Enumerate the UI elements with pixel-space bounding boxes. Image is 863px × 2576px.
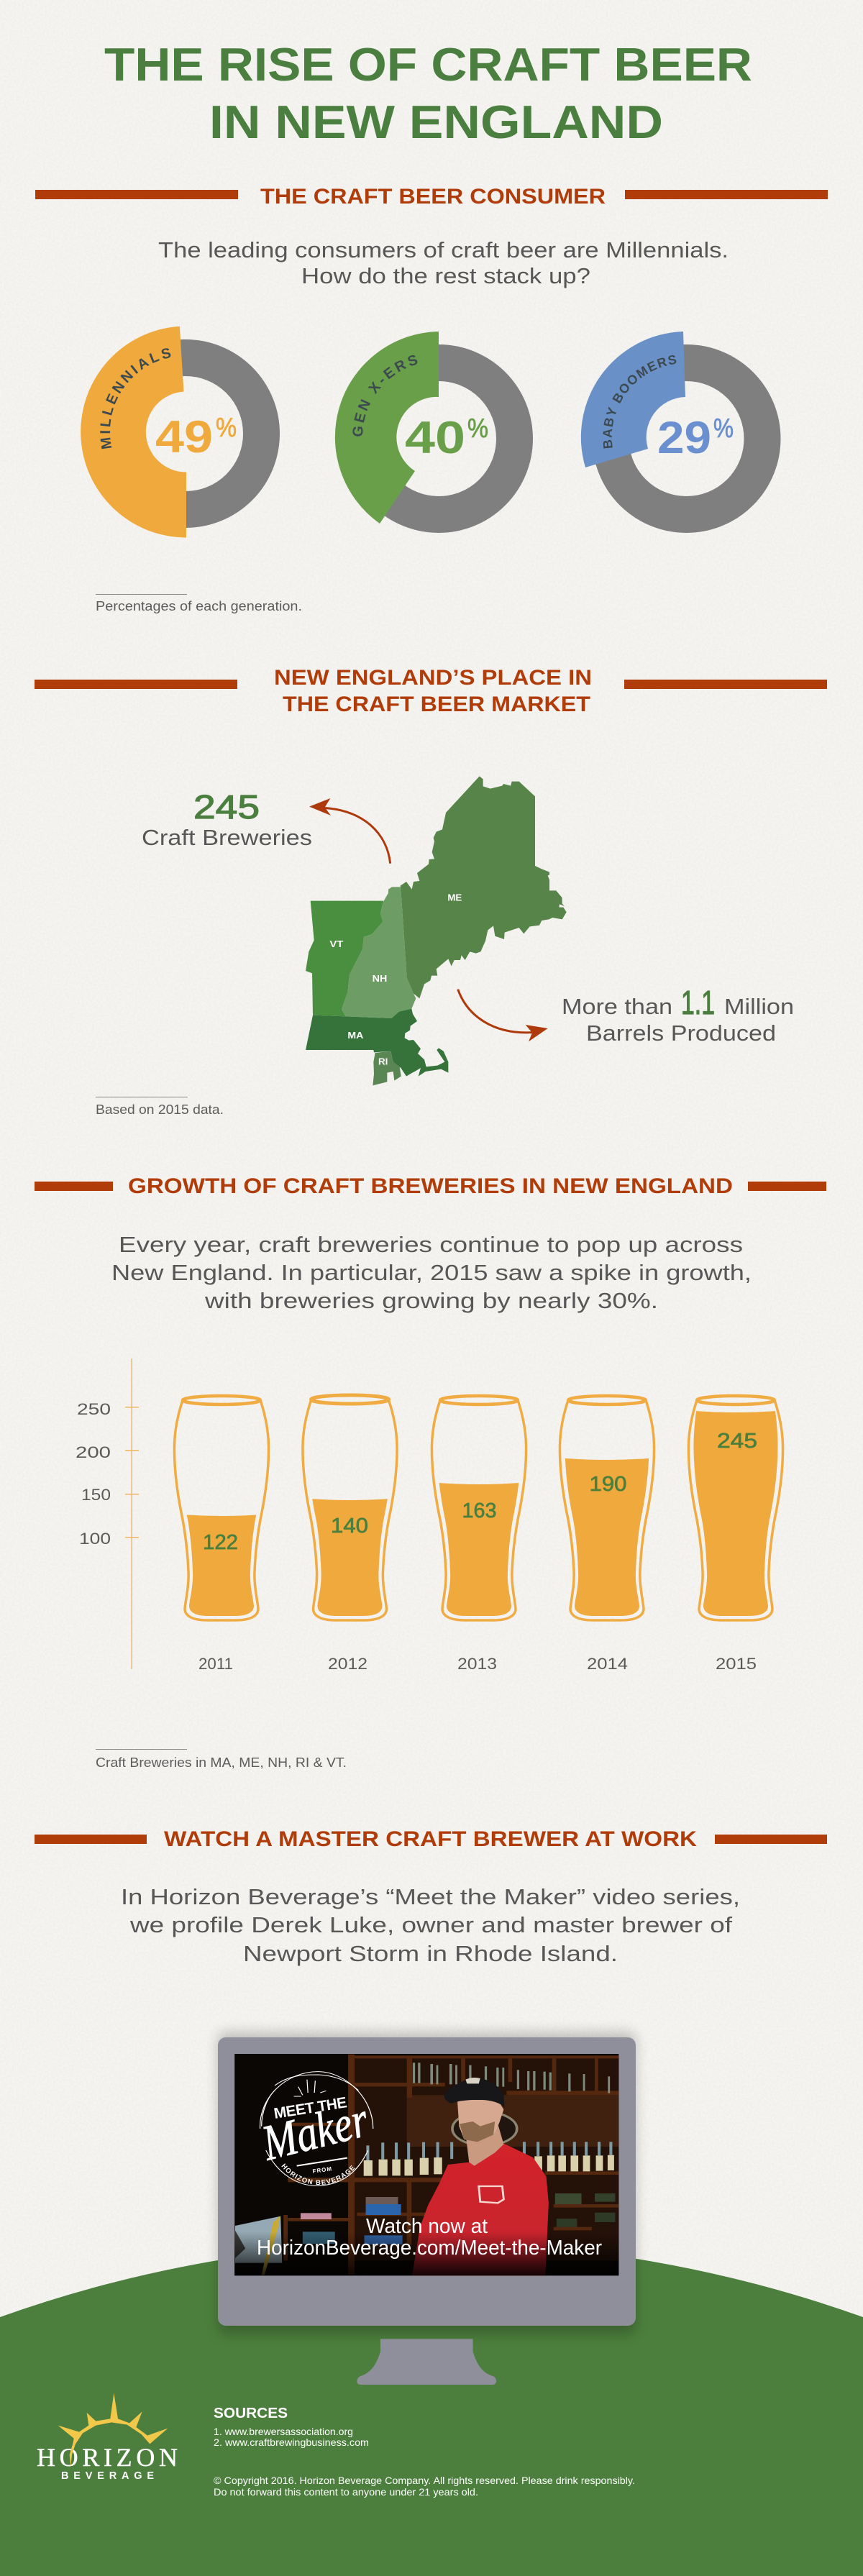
beer glass: 2013, 163: 163 [462, 1499, 496, 1522]
video caption: Watch now at [366, 2215, 488, 2238]
monitor stand [357, 2339, 496, 2385]
donut chart: millennials 49% [81, 326, 280, 538]
beer glass: 2013, 163: 2013 [457, 1655, 497, 1673]
donut chart: millennials 49%: MILLENNIALS [100, 348, 171, 449]
footer green hill [0, 2242, 863, 2576]
sources: 1. www.brewersassociation.org [214, 2426, 353, 2437]
stamp text: meet the maker: HORIZON BEVERAGE [281, 2163, 355, 2185]
icon: sun [58, 2393, 168, 2467]
stat: 1.1 million barrels: More than [562, 994, 672, 1019]
bottle row [364, 2155, 614, 2176]
footnote: percentages: Percentages of each generation. [96, 599, 302, 613]
chart axis: 150 [81, 1486, 111, 1504]
round wall sign [452, 2112, 517, 2145]
donut chart: gen x-ers 40%: 40 [405, 413, 465, 463]
stat: 1.1 million barrels: Barrels Produced [586, 1020, 776, 1046]
chart axis: 200 [76, 1443, 111, 1461]
stat: 245 craft breweries [142, 788, 312, 850]
chart axis: 100 [79, 1530, 111, 1548]
copyright [214, 2475, 635, 2498]
donut chart: baby boomers 29%: BABY BOOMERS [603, 355, 676, 449]
section heading: new england's place: NEW ENGLAND’S PLACE IN [274, 666, 592, 690]
section heading: watch a master [35, 1827, 827, 1851]
state: vermont [306, 901, 383, 1016]
stamp rings and rays [260, 2072, 373, 2186]
beer glass: 2014, 190: 190 [590, 1473, 627, 1496]
donut chart: baby boomers 29%: 29 [657, 413, 711, 463]
section heading: growth [35, 1174, 826, 1198]
logo: horizon beverage: BEVERAGE [61, 2470, 154, 2482]
sources: SOURCES [214, 2406, 288, 2421]
chart axis [76, 1358, 139, 1669]
stamp text: meet the maker: Maker [256, 2092, 374, 2172]
intro text: growth [111, 1232, 752, 1313]
state labels [329, 892, 462, 1067]
title: THE RISE OF CRAFT BEER [104, 38, 752, 91]
video still [234, 2054, 618, 2275]
donut chart: gen x-ers 40%: % [467, 414, 488, 443]
donut chart: baby boomers 29% [581, 332, 762, 515]
state labels: NH [373, 973, 387, 984]
donut chart: baby boomers 29%: % [713, 414, 734, 443]
intro text: meet the maker [121, 1884, 740, 1966]
state: rhode island [373, 1051, 401, 1085]
intro text: meet the maker: we profile Derek Luke, owner and master brewer of [129, 1912, 732, 1937]
intro text: growth: with breweries growing by nearly 30%. [204, 1288, 658, 1313]
stamp text: meet the maker [256, 2092, 374, 2187]
laptop [234, 2216, 282, 2275]
section heading: the craft beer consumer: THE CRAFT BEER CONSUMER [260, 185, 606, 209]
stamp text: meet the maker: FROM [312, 2165, 333, 2175]
beer glass: 2011, 122 [173, 1394, 270, 1669]
man in red shirt [412, 2078, 549, 2275]
state labels: MA [347, 1030, 364, 1041]
intro text: growth: Every year, craft breweries continue to pop up across [119, 1232, 743, 1257]
stat: 1.1 million barrels: Million [724, 994, 794, 1019]
footnote: based on 2015 data: Based on 2015 data. [96, 1102, 224, 1117]
donut chart: millennials 49%: % [216, 413, 237, 442]
sources: 2. www.craftbrewingbusiness.com [214, 2436, 369, 2448]
section heading: new england's place [35, 666, 827, 716]
beer glass: 2015, 245 [688, 1394, 784, 1669]
section heading: watch a master: WATCH A MASTER CRAFT BREWER AT WORK [164, 1827, 697, 1851]
donut chart: gen x-ers 40%: GEN X-ERS [352, 355, 417, 437]
state labels: RI [378, 1056, 388, 1067]
beer glass: 2014, 190 [558, 1394, 656, 1669]
shelf goods [301, 2193, 616, 2244]
beer glass: 2015, 245: 245 [717, 1430, 757, 1453]
copyright: Do not forward this content to anyone under 21 years old. [214, 2486, 478, 2498]
stat: 1.1 million barrels [562, 984, 794, 1046]
state: maine [401, 776, 567, 998]
stat: 1.1 million barrels: 1.1 [681, 984, 715, 1021]
beer glass: 2011, 122: 122 [203, 1531, 238, 1554]
copyright: © Copyright 2016. Horizon Beverage Company. All rights reserved. Please drink responsibly. [214, 2475, 635, 2486]
title: IN NEW ENGLAND [209, 96, 663, 148]
section heading: the craft beer consumer [35, 185, 828, 209]
intro text: consumers: The leading consumers of craft beer are Millennials. [158, 237, 729, 262]
state: new hampshire [342, 887, 416, 1018]
video caption: HorizonBeverage.com/Meet-the-Maker [257, 2237, 602, 2260]
beer glass: 2013, 163 [430, 1394, 528, 1669]
intro text: meet the maker: Newport Storm in Rhode Island. [243, 1941, 618, 1966]
intro text: meet the maker: In Horizon Beverage’s “Meet the Maker” video series, [121, 1884, 740, 1909]
map of new england [306, 776, 567, 1085]
stat: 245 craft breweries: Craft Breweries [142, 825, 312, 850]
intro text: consumers [158, 237, 729, 288]
monitor [211, 2026, 642, 2385]
section heading: new england's place: THE CRAFT BEER MARKET [283, 693, 590, 716]
intro text: consumers: How do the rest stack up? [301, 263, 590, 288]
state labels: ME [447, 892, 462, 903]
logo: horizon beverage: HORIZON [37, 2443, 178, 2472]
section heading: growth: GROWTH OF CRAFT BREWERIES IN NEW ENGLAND [128, 1174, 733, 1198]
arrow: to craft breweries [309, 798, 391, 864]
beer glass: 2012, 140: 2012 [328, 1655, 367, 1673]
beer glass: 2015, 245: 2015 [716, 1655, 757, 1673]
video caption [257, 2215, 602, 2260]
donut chart: millennials 49%: 49 [155, 412, 213, 462]
beer glass: 2014, 190: 2014 [587, 1655, 628, 1673]
donut chart: gen x-ers 40% [335, 332, 533, 533]
beer glass: 2012, 140: 140 [331, 1515, 368, 1538]
beer glass: 2011, 122: 2011 [198, 1655, 233, 1673]
logo: horizon beverage [37, 2393, 178, 2482]
chart axis: 250 [77, 1400, 111, 1418]
stat: 245 craft breweries: 245 [193, 788, 260, 826]
arrow: to barrels produced [458, 990, 548, 1041]
title [104, 38, 752, 148]
intro text: growth: New England. In particular, 2015 saw a spike in growth, [111, 1260, 752, 1285]
footnote: craft breweries states: Craft Breweries in MA, ME, NH, RI & VT. [96, 1755, 347, 1770]
state labels: VT [329, 938, 343, 949]
beer glass: 2012, 140 [301, 1394, 398, 1669]
bottles top shelf [413, 2063, 610, 2093]
sources [214, 2406, 369, 2448]
stamp text: meet the maker: MEET THE [273, 2094, 350, 2122]
state: massachusetts [306, 1009, 448, 1077]
